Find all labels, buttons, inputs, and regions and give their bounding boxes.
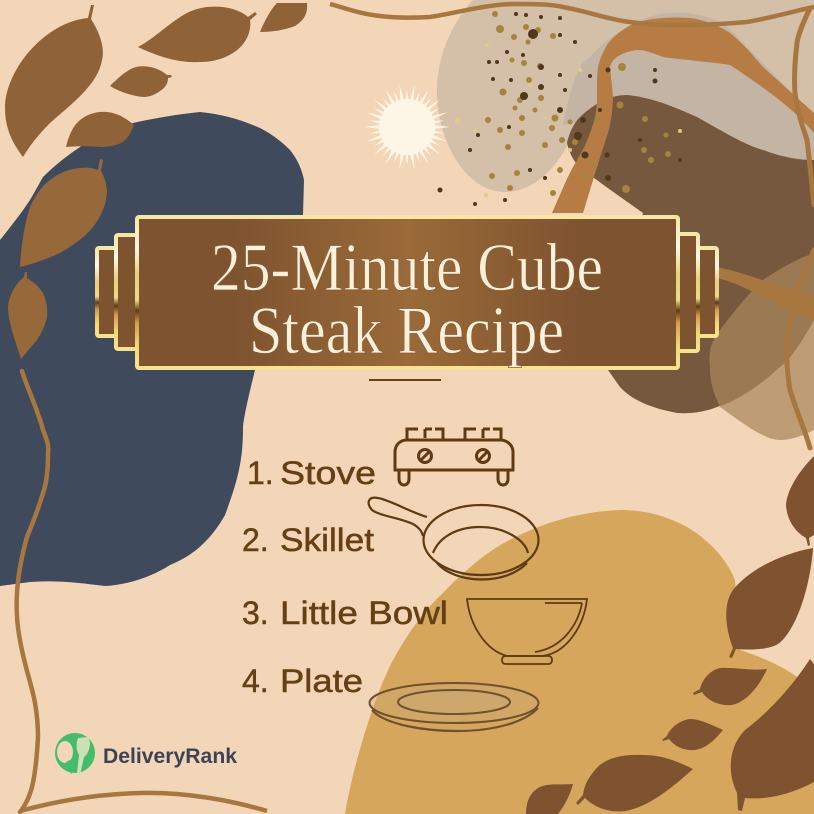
list item 2: skillet xyxy=(242,522,374,558)
title banner xyxy=(97,217,717,368)
list item 4: plate: Plate xyxy=(280,663,363,699)
icon: plate xyxy=(370,683,538,731)
banner title text: Steak Recipe xyxy=(249,292,564,368)
logo mark xyxy=(55,733,95,775)
blob: mustard xyxy=(345,510,814,814)
divider xyxy=(369,379,441,381)
banner title text xyxy=(211,229,603,368)
icon: bowl xyxy=(467,599,587,664)
blob: dark brown xyxy=(567,95,814,413)
list item 3: little bowl: 3. xyxy=(242,595,269,631)
icon: stove xyxy=(395,429,513,485)
vine frame: bottom xyxy=(20,793,267,811)
list item 4: plate xyxy=(242,663,363,699)
banner left tabs xyxy=(97,235,137,349)
banner title text: 25-Minute Cube xyxy=(211,229,603,305)
leaves: bottom right xyxy=(526,456,814,814)
vine frame: left xyxy=(17,371,48,812)
list item 1: stove: Stove xyxy=(280,455,376,491)
blob: navy xyxy=(0,112,304,586)
gold glitter xyxy=(438,11,682,206)
list item 2: skillet: Skillet xyxy=(280,522,374,558)
banner right tabs xyxy=(677,234,717,351)
banner main panel xyxy=(137,217,678,368)
blob: mid grey xyxy=(563,13,814,170)
list item 2: skillet: 2. xyxy=(242,522,269,558)
ribbon: lower orange strand xyxy=(716,267,814,320)
vine frame: right xyxy=(787,8,814,448)
list item 1: stove: 1. xyxy=(247,455,274,491)
blob: translucent tan xyxy=(709,253,814,440)
ribbon: orange upper xyxy=(552,18,814,213)
list item 4: plate: 4. xyxy=(242,663,269,699)
logo wordmark: DeliveryRank xyxy=(103,745,237,768)
logo: DeliveryRank xyxy=(55,733,237,775)
icon: skillet xyxy=(369,498,538,580)
list item 1: stove xyxy=(247,455,376,491)
vine frame: top xyxy=(330,4,814,25)
list item 3: little bowl: Little Bowl xyxy=(280,595,448,631)
leaves: top left xyxy=(5,3,307,157)
sun xyxy=(364,84,450,170)
leaves: on navy xyxy=(8,159,107,359)
blob: light grey xyxy=(437,0,814,192)
